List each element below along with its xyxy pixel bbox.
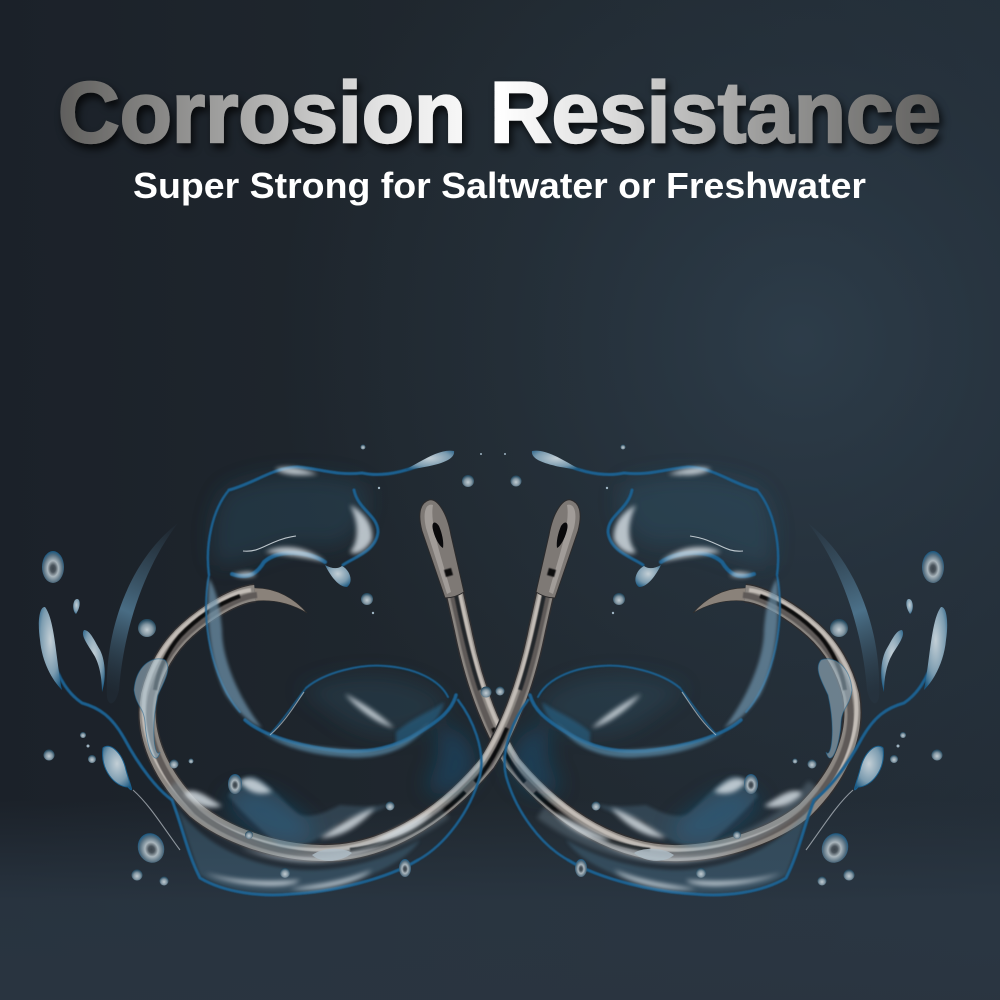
left water splash — [39, 444, 481, 895]
title: Corrosion Resistance — [58, 65, 941, 161]
subtitle: Super Strong for Saltwater or Freshwater — [133, 165, 866, 206]
right water splash — [505, 444, 947, 895]
left hook — [144, 500, 580, 855]
right hook — [420, 500, 856, 855]
centre droplets — [462, 453, 522, 698]
